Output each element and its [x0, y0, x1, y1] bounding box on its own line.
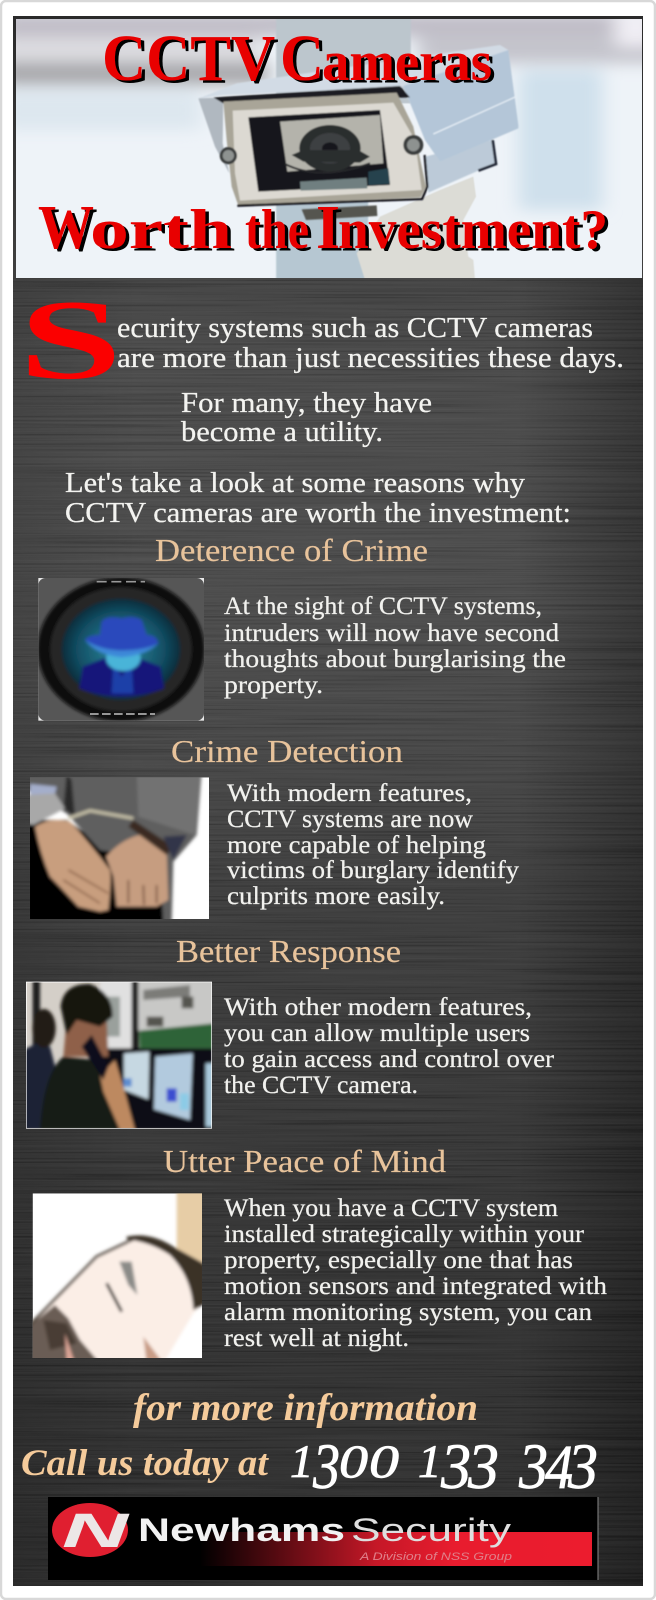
upper pole — [276, 17, 411, 103]
image: lens with spy icon — [38, 577, 204, 721]
text: peace of mind — [224, 1195, 608, 1352]
intro paragraph 2 — [181, 388, 432, 448]
phone number: 4 — [545, 1434, 573, 1502]
intro paragraph 2: become a utility. — [181, 417, 383, 448]
camera housing — [198, 45, 518, 220]
phone number: 1 — [290, 1436, 314, 1488]
logo wordmark light: Security — [351, 1512, 511, 1548]
phone number: 3 — [312, 1431, 340, 1503]
intro paragraph 1: ecurity systems such as CCTV cameras — [117, 313, 593, 344]
call to action: for more information: for more information — [133, 1387, 478, 1429]
title line 2: orth — [90, 199, 232, 261]
intro text — [19, 276, 624, 529]
image: handcuffed hands — [27, 773, 209, 923]
title line 2: W — [38, 194, 94, 262]
image: control room operator — [23, 980, 213, 1130]
text: better response — [224, 994, 555, 1099]
text: peace of mind: motion sensors and integrated with — [224, 1273, 608, 1300]
phone number: 1 — [418, 1436, 442, 1488]
text: deterrence: intruders will now have second — [224, 620, 560, 647]
logo red bar — [200, 1532, 592, 1566]
intro paragraph 2: For many, they have — [181, 388, 432, 419]
text: crime detection: culprits more easily. — [227, 883, 445, 910]
intro paragraph 3: CCTV cameras are worth the investment: — [65, 498, 571, 529]
phone number: 0 — [339, 1436, 368, 1488]
intro paragraph 1: are more than just necessities these days. — [117, 343, 624, 374]
title line 2: I — [316, 194, 340, 262]
intro paragraph 1 — [117, 313, 624, 374]
header photo: CCTV camera — [0, 13, 656, 280]
phone number: 3 — [567, 1431, 598, 1503]
heading: Crime Detection: Crime Detection — [171, 733, 403, 769]
text: deterrence: thoughts about burglarising the — [224, 646, 566, 673]
call to action: call us today: Call us today at — [21, 1443, 270, 1484]
heading: Deterence of Crime: Deterence of Crime — [155, 532, 428, 568]
text: crime detection: CCTV systems are now — [227, 806, 473, 833]
heading: Utter Peace of Mind: Utter Peace of Mind — [163, 1143, 446, 1179]
text: deterrence: property. — [224, 672, 323, 699]
logo wordmark bold: Newhams — [138, 1512, 345, 1548]
text: peace of mind: When you have a CCTV system — [224, 1195, 559, 1222]
logo: Newhams Security — [48, 1497, 598, 1580]
phone number: 3 — [440, 1431, 471, 1503]
text: crime detection: more capable of helping — [227, 832, 487, 859]
title line 1: CCTV — [102, 22, 274, 95]
heading: Better Response: Better Response — [176, 933, 401, 969]
text: crime detection: With modern features, — [227, 780, 472, 807]
phone number: 0 — [369, 1436, 399, 1488]
text: peace of mind: installed strategically within your — [224, 1221, 585, 1248]
intro paragraph 3 — [65, 468, 571, 529]
drop cap: S — [19, 276, 122, 403]
phone number: 3 — [467, 1431, 499, 1503]
logo N mark: N — [62, 1505, 131, 1558]
text: peace of mind: alarm monitoring system, you can — [224, 1299, 593, 1326]
text: crime detection — [227, 780, 520, 910]
text: deterrence — [224, 593, 566, 699]
intro paragraph 3: Let's take a look at some reasons why — [65, 468, 526, 499]
title line 1: C — [280, 22, 324, 95]
text: better response: With other modern features, — [224, 994, 532, 1021]
text: peace of mind: rest well at night. — [224, 1325, 409, 1352]
title line 2: the — [245, 199, 309, 261]
image: man sleeping — [32, 1193, 202, 1358]
camera bracket — [357, 177, 476, 280]
text: better response: you can allow multiple users — [224, 1020, 530, 1047]
text: deterrence: At the sight of CCTV systems, — [224, 593, 542, 620]
title line 1: ameras — [322, 31, 492, 93]
phone number: 3 — [518, 1431, 548, 1503]
text: peace of mind: property, especially one that has — [224, 1247, 573, 1274]
text: better response: the CCTV camera. — [224, 1072, 418, 1099]
logo red circle — [52, 1503, 128, 1557]
text: crime detection: victims of burglary identify — [227, 857, 520, 884]
logo tagline: A Division of NSS Group — [359, 1551, 512, 1563]
title line 2: nvestment? — [338, 199, 608, 261]
text: better response: to gain access and control over — [224, 1046, 555, 1073]
lower pole — [276, 200, 368, 280]
